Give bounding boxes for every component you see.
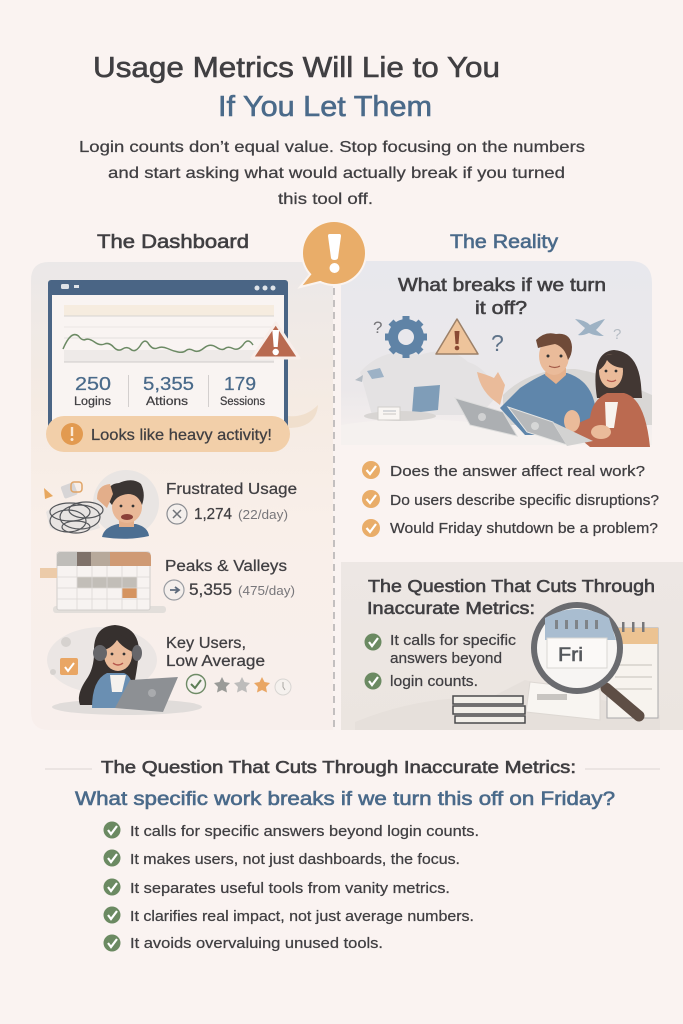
stat: logins: 250 <box>75 373 111 394</box>
panel: dashboard background <box>31 262 333 730</box>
papers <box>526 682 600 720</box>
icon: x mark <box>575 319 605 336</box>
heading: the dashboard: The Dashboard <box>97 231 249 253</box>
stat: actions: Attions <box>146 396 188 408</box>
item: frustrated usage <box>44 470 297 539</box>
stat: actions <box>143 373 194 408</box>
icon: alert speech bubble <box>300 220 367 287</box>
illustration: woman with laptop <box>47 625 202 715</box>
illustration: magnifier over calendar and books <box>355 605 660 730</box>
chart <box>63 305 274 362</box>
callout: question heading <box>367 576 655 618</box>
item: frustrated usage: Frustrated Usage <box>166 481 297 498</box>
illustration: paper and mug <box>355 368 440 421</box>
browser frame <box>48 280 288 440</box>
heading: question that cuts through: The Question That Cuts Through Inaccurate Metrics: <box>101 757 576 777</box>
title: Usage Metrics Will Lie to You <box>93 52 500 84</box>
icon: warning sign <box>436 319 478 354</box>
callout checklist: answers beyond <box>390 650 502 667</box>
illustration: calendar <box>40 552 166 613</box>
callout checklist <box>364 632 517 690</box>
item: peaks and valleys: Peaks & Valleys <box>165 558 287 575</box>
check item two: Do users describe specific disruptions? <box>390 492 659 509</box>
item: frustrated usage: (22/day) <box>238 507 288 522</box>
divider lines <box>45 768 92 770</box>
item: key users low average: Low Average <box>166 653 265 670</box>
title <box>93 52 500 123</box>
item five: It avoids overvaluing unused tools. <box>130 935 383 952</box>
item: key users low average: Key Users, <box>166 635 246 652</box>
item: frustrated usage: 1,274 <box>194 506 232 523</box>
callout: question heading: Inaccurate Metrics: <box>367 598 535 618</box>
decorative leaf behind pill <box>288 405 318 428</box>
illustration: reality scene: ? <box>373 318 382 337</box>
illustration: man <box>477 333 595 435</box>
icon row: check, stars, clock <box>186 674 291 695</box>
heading: key question: What specific work breaks if we turn this off on Friday? <box>75 789 615 810</box>
back notepad <box>607 622 658 718</box>
icon: x circle <box>167 504 187 524</box>
magnifier lens <box>534 605 620 691</box>
dashboard window illustration <box>48 280 299 440</box>
magnifier lens: Fri <box>558 645 583 666</box>
item four: It clarifies real impact, not just average numbers. <box>130 908 474 925</box>
item one: It calls for specific answers beyond login counts. <box>130 823 479 840</box>
item: key users low average <box>47 625 291 715</box>
heading: what breaks <box>398 274 606 318</box>
stat: logins <box>74 373 111 408</box>
callout: question heading: The Question That Cuts Through <box>368 576 655 596</box>
callout checklist: It calls for specific <box>390 632 517 649</box>
bottom checklist <box>104 822 479 952</box>
check item three: Would Friday shutdown be a problem? <box>390 520 658 537</box>
column divider <box>333 288 335 730</box>
stat: logins: Logins <box>74 396 111 408</box>
callout checklist: login counts. <box>390 673 478 690</box>
illustration: couch back <box>503 369 652 425</box>
heading: what breaks: it off? <box>475 297 527 318</box>
panel: question callout background <box>341 562 683 730</box>
stat: actions: 5,355 <box>143 373 194 394</box>
heading: the reality: The Reality <box>450 231 558 253</box>
icon: gear <box>385 316 427 358</box>
illustration: woman <box>564 350 650 447</box>
heading: what breaks: What breaks if we turn <box>398 274 606 295</box>
title: If You Let Them <box>218 91 432 123</box>
stat: sessions: Sessions <box>220 396 265 408</box>
illustration: laptops <box>455 398 593 446</box>
panel: reality background <box>341 261 652 445</box>
magnifier handle <box>606 688 639 716</box>
callout: looks like heavy activity <box>46 416 290 452</box>
intro text block: this tool off. <box>278 191 373 208</box>
checklist: reality questions <box>362 461 659 537</box>
item three: It separates useful tools from vanity metrics. <box>130 880 450 897</box>
intro text block: and start asking what would actually break if you turned <box>108 165 565 182</box>
callout: looks like heavy activity: Looks like heavy activity! <box>91 427 272 444</box>
illustration: frustrated man <box>44 470 159 539</box>
item: peaks and valleys <box>40 552 295 613</box>
stat: sessions: 179 <box>224 373 256 394</box>
check item one: Does the answer affect real work? <box>390 463 645 480</box>
item: peaks and valleys: (475/day) <box>238 583 295 598</box>
books <box>453 696 525 723</box>
stat: sessions <box>220 373 265 408</box>
item: peaks and valleys: 5,355 <box>189 581 232 599</box>
illustration: reality scene: ? <box>491 330 504 356</box>
icon: warning triangle <box>252 323 299 358</box>
illustration: reality scene: ? <box>613 326 621 343</box>
intro text block <box>79 139 585 208</box>
illustration: reality scene <box>341 316 652 447</box>
item two: It makes users, not just dashboards, the focus. <box>130 851 460 868</box>
intro text block: Login counts don’t equal value. Stop focusing on the numbers <box>79 139 585 156</box>
icon: arrow circle <box>164 580 184 600</box>
